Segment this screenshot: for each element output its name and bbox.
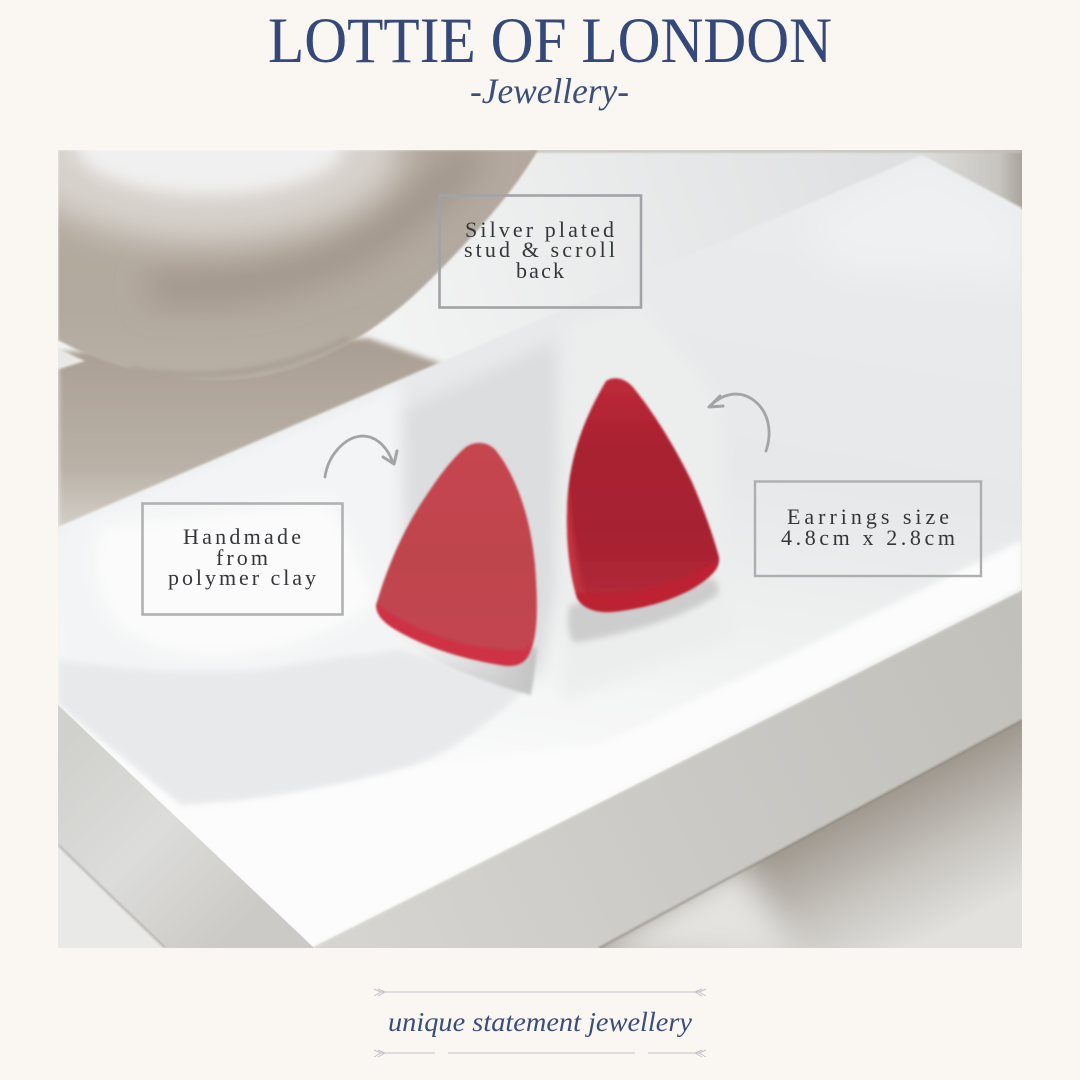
- callout: earrings size: 4.8cm x 2.8cm: [781, 525, 955, 550]
- callout: silver plated stud: back: [516, 258, 564, 283]
- block right side face: [313, 590, 1022, 948]
- right earring: [555, 378, 722, 620]
- left earring: [370, 443, 537, 675]
- callout: earrings size: [755, 482, 981, 576]
- callout: handmade: from: [216, 545, 268, 570]
- pale left area: [237, 390, 398, 495]
- bowl cast shadow: [58, 338, 443, 530]
- arrow: to right earring: [709, 394, 769, 451]
- callout: handmade: [142, 504, 342, 614]
- bowl: [58, 150, 538, 380]
- product photo panel: [58, 150, 1022, 948]
- callout: silver plated stud: Silver plated: [465, 217, 614, 242]
- arrow: to left earring: [325, 436, 397, 477]
- title: LOTTIE OF LONDON: [268, 5, 832, 77]
- white block top surface: [58, 155, 1022, 947]
- footer ornament: bottom line: [374, 1050, 706, 1057]
- footer tagline: unique statement jewellery: [388, 1007, 692, 1037]
- floor: [58, 845, 165, 948]
- callout: silver plated stud: [440, 196, 641, 308]
- reflections on the surface: [94, 500, 378, 657]
- footer ornament: top line: [374, 989, 706, 996]
- callout: earrings size: Earrings size: [787, 504, 949, 529]
- block left side face: [58, 705, 313, 948]
- window reflection: [405, 340, 557, 680]
- callout: silver plated stud: stud & scroll: [464, 237, 615, 262]
- subtitle: -Jewellery-: [470, 71, 629, 111]
- callout: handmade: polymer clay: [168, 565, 316, 590]
- earring shadows: [428, 648, 538, 696]
- callout: handmade: Handmade: [183, 524, 301, 549]
- back surface: [393, 150, 1022, 590]
